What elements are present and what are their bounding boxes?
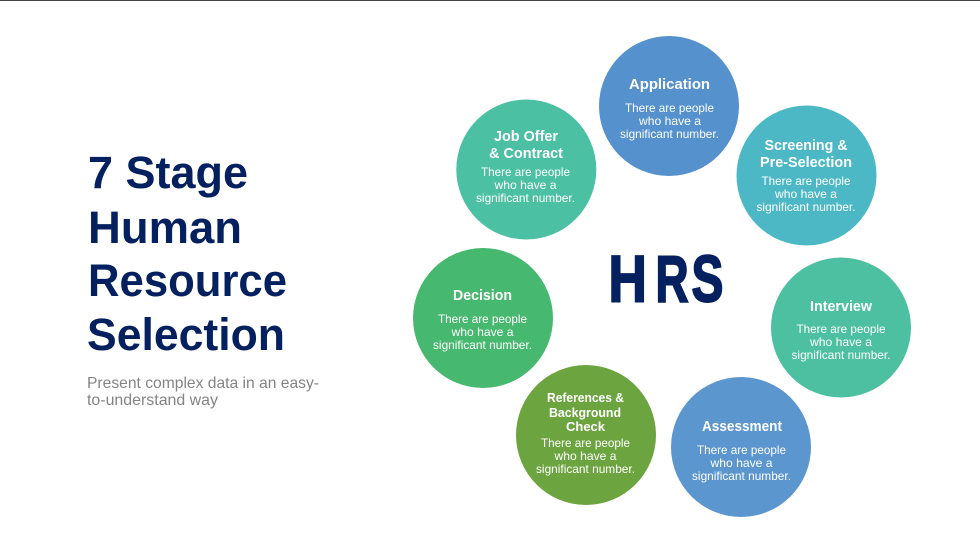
stage: Screening and Pre-Selection: who have a	[774, 187, 837, 201]
stage: Decision	[413, 248, 553, 388]
stage: Decision: There are people	[438, 312, 527, 326]
stage: Interview: Interview	[810, 299, 873, 315]
stage: Application: who have a	[638, 114, 701, 128]
stage: References and Background Check: References &	[547, 391, 624, 405]
stage: Screening and Pre-Selection: Screening &	[764, 138, 848, 154]
stage: Assessment: significant number.	[692, 469, 791, 483]
stage: Job Offer and Contract: There are people	[481, 165, 570, 179]
stage: References and Background Check: who have a	[553, 449, 617, 463]
stage: References and Background Check: significant number.	[536, 462, 635, 476]
stage: References and Background Check: There are people	[541, 436, 630, 450]
center label: HRS	[608, 242, 723, 316]
stage: Screening and Pre-Selection: significant number.	[756, 200, 856, 214]
stage: Job Offer and Contract: significant number.	[476, 191, 575, 205]
stage: Job Offer and Contract: Job Offer	[494, 129, 558, 145]
title	[87, 147, 287, 360]
stage: Interview: who have a	[809, 335, 872, 349]
title: 7 Stage	[88, 147, 248, 198]
stage: References and Background Check	[516, 365, 656, 505]
subtitle: to-understand way	[87, 392, 218, 409]
stage: Application: significant number.	[620, 127, 719, 141]
stage: Screening and Pre-Selection: There are people	[762, 174, 851, 188]
stage: References and Background Check: Check	[566, 420, 605, 434]
title: Resource	[88, 255, 287, 306]
stage: Interview: There are people	[796, 322, 886, 336]
stage: Assessment	[671, 377, 811, 517]
stage: Application: There are people	[625, 101, 714, 115]
stage: Application	[599, 36, 739, 176]
stage: Screening and Pre-Selection: Pre-Selection	[760, 155, 852, 171]
stage: Screening and Pre-Selection	[736, 106, 876, 246]
stage: Assessment: Assessment	[702, 419, 782, 435]
stage: Job Offer and Contract: who have a	[493, 178, 557, 192]
center label: HRS: R	[656, 242, 689, 315]
stage: Decision: Decision	[453, 288, 512, 304]
stage: Decision: significant number.	[433, 338, 532, 352]
stage: References and Background Check: Background	[549, 406, 621, 420]
stage: Decision: who have a	[450, 325, 514, 339]
stage: Interview	[771, 258, 911, 398]
subtitle	[87, 375, 319, 409]
center label: HRS: S	[692, 243, 723, 316]
stage: Interview: significant number.	[792, 348, 890, 362]
center label: HRS: H	[608, 242, 647, 316]
stage: Assessment: who have a	[709, 456, 773, 470]
stage: Assessment: There are people	[697, 443, 786, 457]
stage: Job Offer and Contract: & Contract	[489, 146, 563, 162]
subtitle: Present complex data in an easy-	[87, 375, 319, 392]
stage: Job Offer and Contract	[456, 100, 596, 240]
stage: Application: Application	[629, 77, 710, 93]
title: Human	[88, 202, 242, 253]
title: Selection	[87, 309, 285, 360]
